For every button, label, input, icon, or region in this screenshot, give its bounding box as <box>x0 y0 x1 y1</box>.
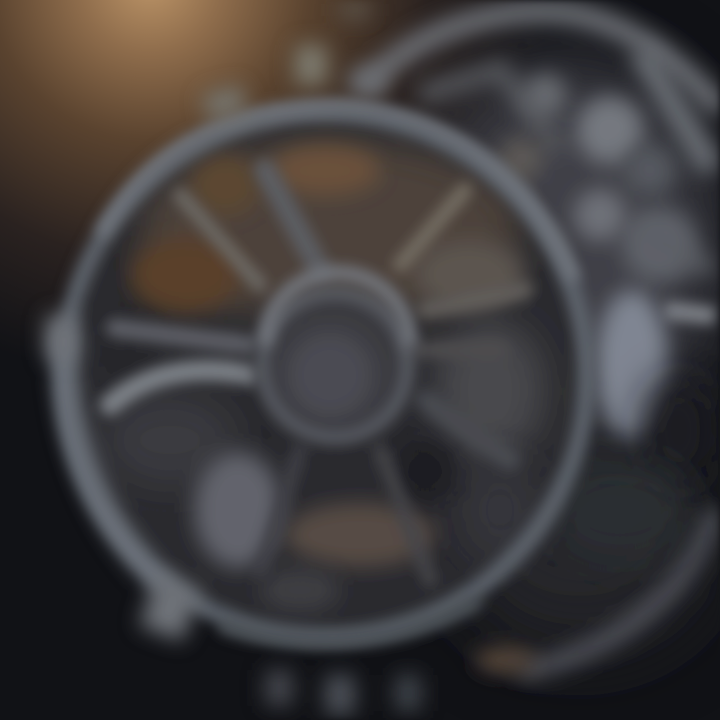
main gear inner face <box>67 117 583 633</box>
main gear rim <box>63 105 587 641</box>
main gear spokes <box>110 170 525 580</box>
rear gear wheel <box>365 12 720 672</box>
central hub <box>257 272 413 443</box>
gear teeth <box>46 2 421 715</box>
